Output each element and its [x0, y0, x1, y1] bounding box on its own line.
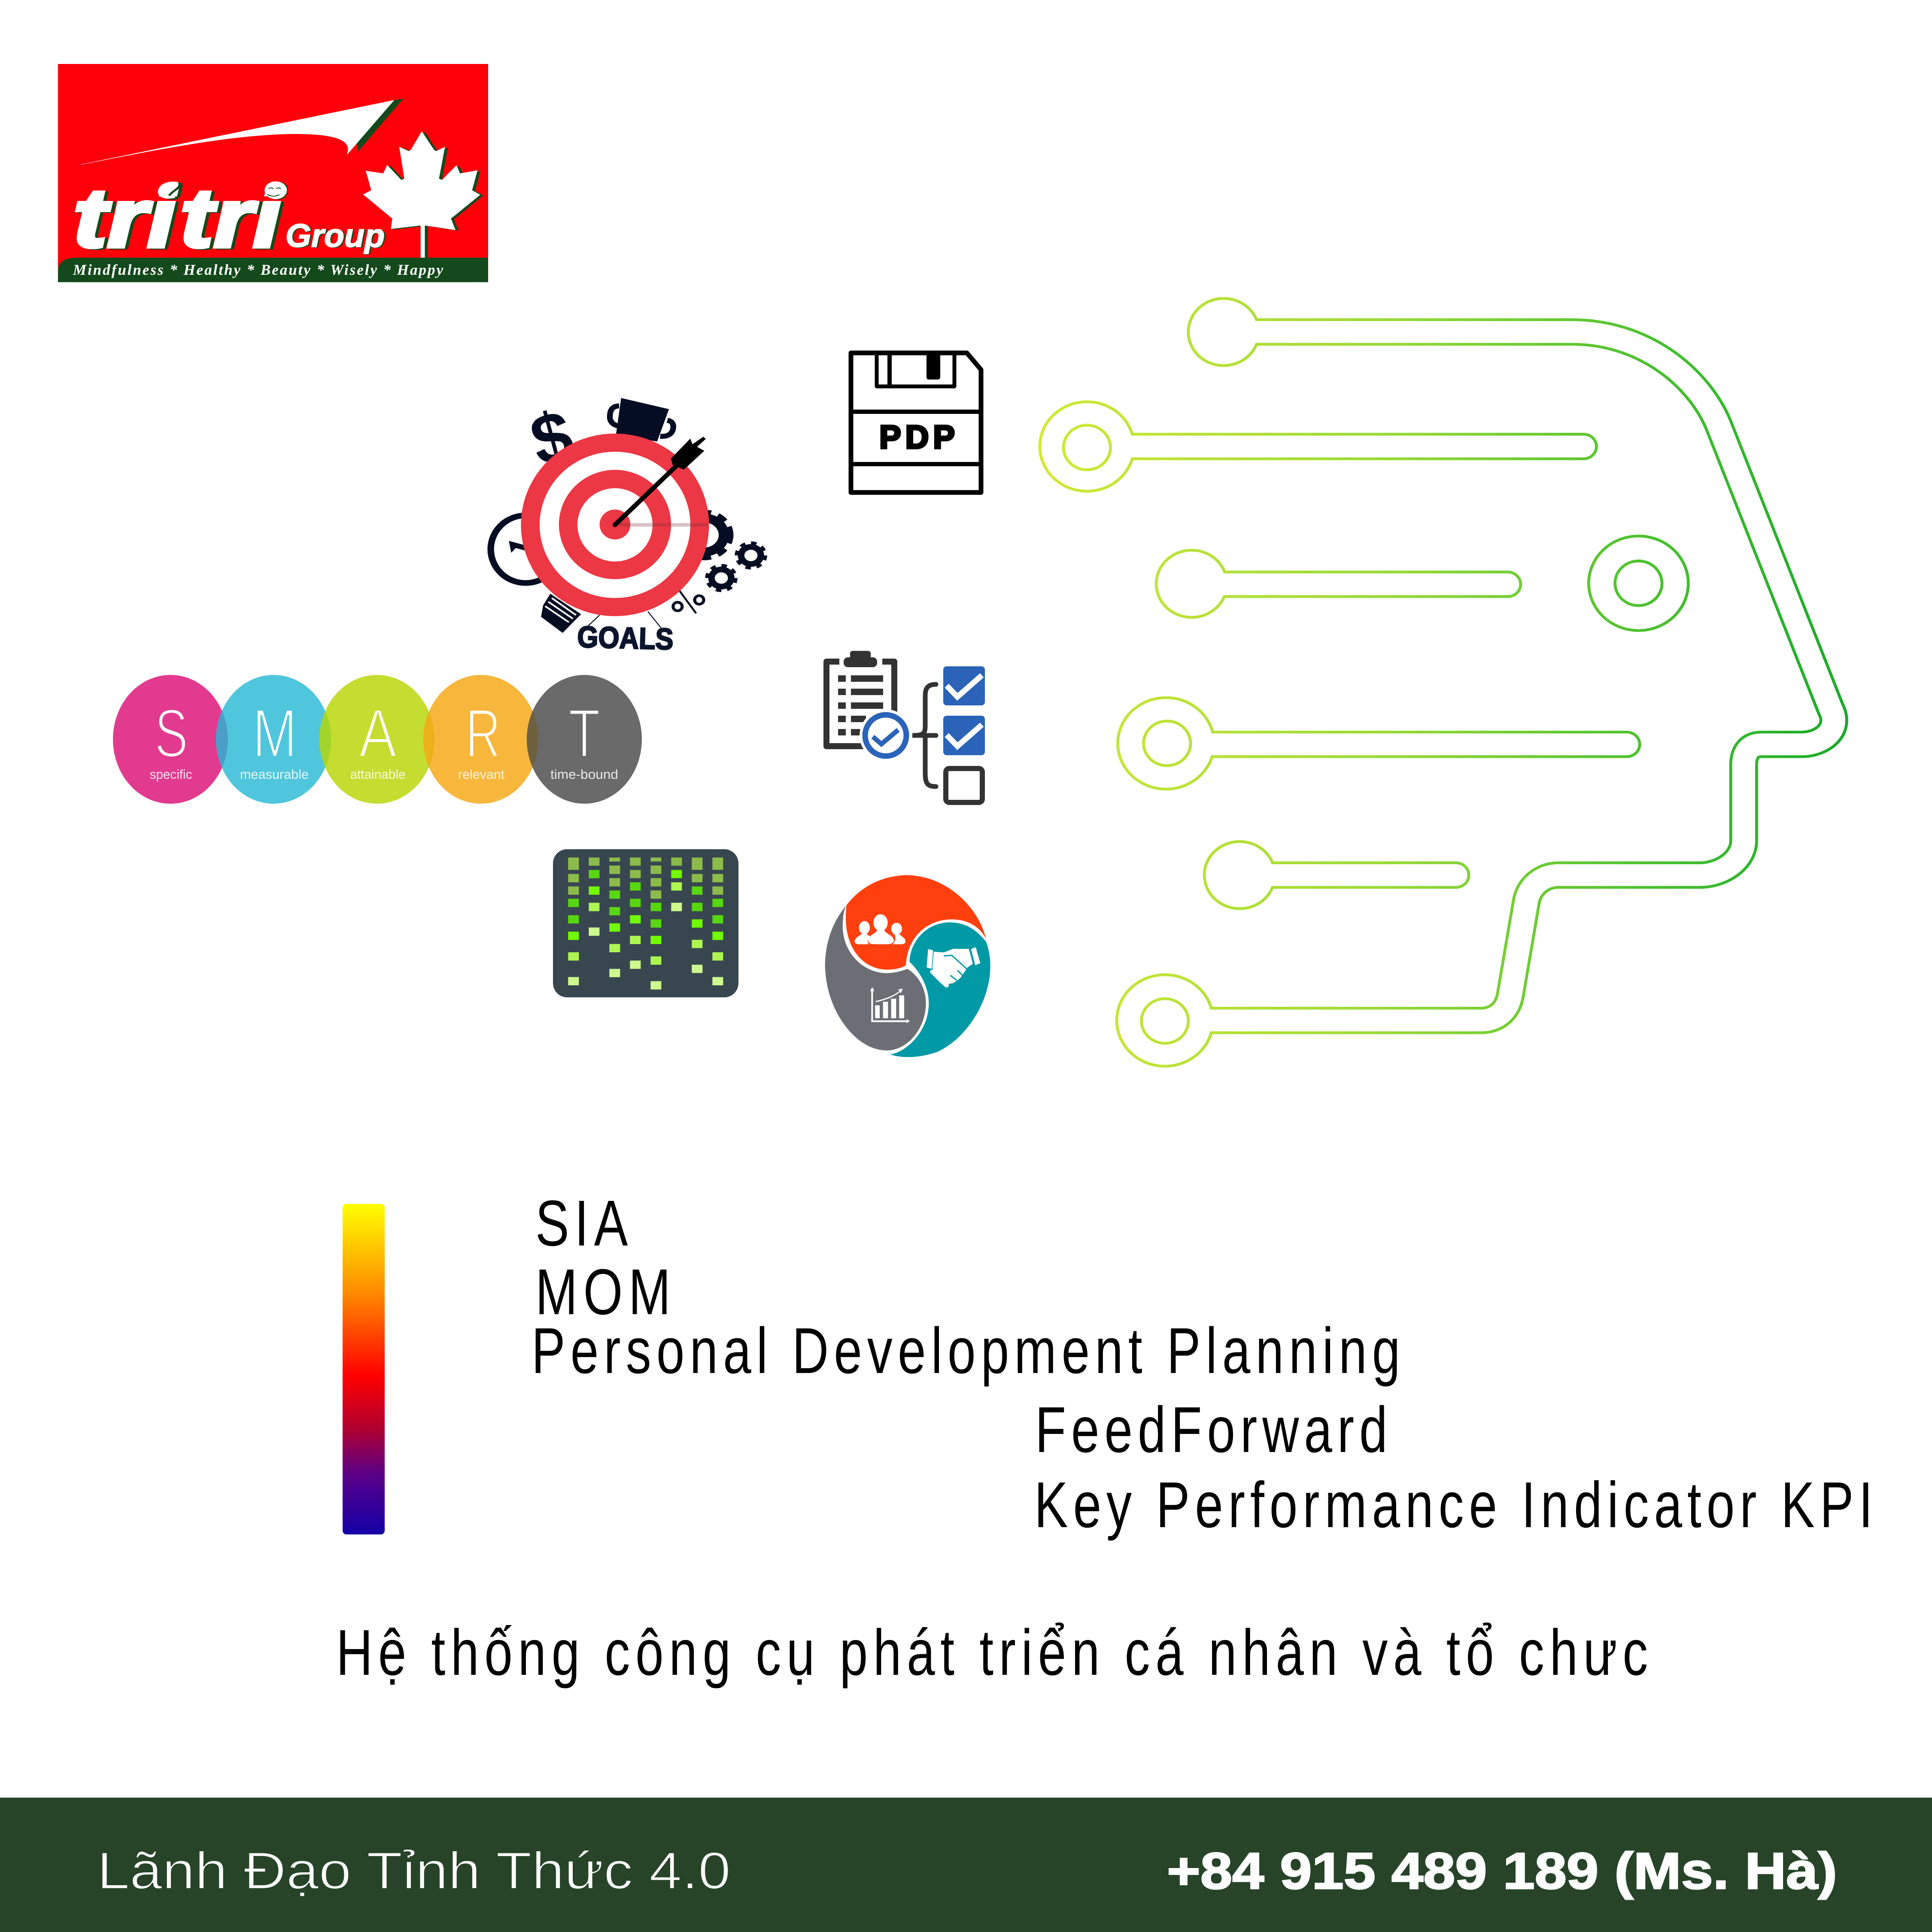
circle R	[423, 675, 538, 804]
icon: checklist	[826, 651, 985, 802]
circle M	[216, 675, 331, 804]
grey segment	[825, 905, 926, 1051]
text list: SIA: SIA	[535, 1187, 628, 1259]
brace	[912, 684, 936, 787]
icon: three-part swirl	[825, 875, 990, 1057]
circle S	[113, 675, 228, 804]
light cells	[568, 882, 723, 965]
pale cells	[568, 903, 723, 990]
circle S: specific	[149, 767, 192, 782]
document	[541, 594, 581, 633]
footer title: Lãnh Đạo Tỉnh Thức 4.0	[97, 1841, 731, 1900]
clipboard	[826, 651, 894, 746]
GOALS label: GOALS	[577, 620, 674, 656]
footer phone: +84 915 489 189 (Ms. Hà)	[1167, 1842, 1837, 1900]
logo: maple leaf	[363, 131, 483, 258]
SMART circles	[113, 675, 642, 804]
logo: tritri wordmark: tri	[180, 171, 283, 265]
circle T: time-bound	[550, 767, 618, 782]
logo: paper plane	[81, 99, 404, 164]
logo: tritri wordmark	[73, 171, 283, 265]
logo: smiley dots	[158, 181, 288, 200]
orange segment	[846, 875, 986, 969]
dollar sign: $	[522, 395, 581, 481]
circle S: S	[155, 695, 188, 772]
arrow	[615, 437, 706, 525]
circle R: R	[465, 695, 501, 772]
circle M: measurable	[240, 767, 309, 782]
panel: green heat grid	[553, 849, 738, 997]
teal segment	[890, 922, 990, 1057]
head outline and circuit lines	[1039, 297, 1834, 1068]
text list: FeedForward: FeedForward	[1035, 1393, 1388, 1466]
mid cells	[568, 870, 723, 928]
icon: goals target	[491, 395, 765, 656]
circle R: relevant	[458, 767, 504, 782]
logo: tritri Group	[58, 64, 488, 282]
footer band	[0, 1798, 1932, 1932]
text list: Key Performance Indicator KPI: Key Performance Indicator KPI	[1034, 1468, 1873, 1541]
gradient bar	[343, 1204, 385, 1534]
text list: MOM: MOM	[535, 1255, 671, 1328]
icon: PDP floppy file	[851, 353, 981, 492]
text list: Personal Development Planning: Personal Development Planning	[532, 1314, 1400, 1387]
callout lines	[588, 611, 662, 629]
trophy	[610, 398, 673, 441]
percent sign	[673, 591, 704, 613]
circle A: attainable	[350, 767, 405, 782]
subtitle: Hệ thống công cụ phát triển cá nhân và tổ chưc	[336, 1616, 1648, 1689]
circle A	[319, 675, 434, 804]
checkboxes	[943, 666, 985, 802]
check badge	[860, 709, 912, 762]
circle T: T	[568, 695, 600, 772]
circle A: A	[359, 695, 397, 772]
PDP label: PDP	[879, 419, 955, 456]
stopwatch	[491, 516, 561, 583]
logo: green tagline band	[58, 258, 488, 282]
icon: circuit head	[1039, 297, 1834, 1068]
logo: Group word: Group	[286, 218, 385, 254]
circle T	[527, 675, 642, 804]
logo: tagline: Mindfulness * Healthy * Beauty * Wisely * Happy	[73, 261, 443, 278]
bullseye	[521, 434, 709, 616]
logo: tritri wordmark: tri	[73, 171, 178, 265]
bright cells	[568, 870, 723, 944]
dim cells	[568, 857, 723, 899]
circle M: M	[252, 695, 297, 772]
gears	[678, 512, 765, 590]
